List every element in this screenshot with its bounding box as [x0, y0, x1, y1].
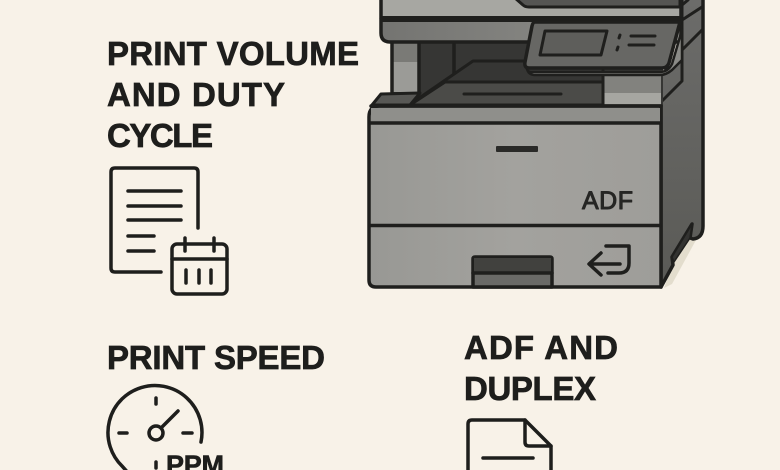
heading: print volume and duty cycle: CYCLE — [107, 117, 213, 154]
heading: print volume and duty cycle — [107, 35, 359, 154]
base left ledge — [372, 93, 420, 105]
icon: return arrow — [589, 246, 629, 275]
top strip — [371, 108, 660, 123]
heading: print speed: PRINT SPEED — [107, 339, 325, 376]
icon: document — [468, 420, 551, 470]
printer illustration — [369, 0, 703, 288]
scanner top — [381, 0, 681, 42]
control panel — [525, 22, 682, 75]
right block — [603, 74, 661, 105]
ADF label: ADF — [582, 187, 633, 215]
heading: print volume and duty cycle: AND DUTY — [107, 76, 285, 113]
heading: print volume and duty cycle: PRINT VOLUME — [107, 35, 359, 72]
icon: document with calendar — [111, 168, 227, 294]
handle — [496, 146, 538, 152]
output tray — [409, 61, 603, 105]
touchscreen — [540, 31, 607, 55]
paper drawer line — [370, 224, 660, 227]
heading: ADF and duplex: DUPLEX — [464, 370, 596, 407]
cavity — [393, 40, 663, 106]
heading: ADF and duplex — [464, 329, 618, 407]
left column — [392, 42, 454, 94]
floor shadow — [664, 238, 696, 288]
lower tray — [473, 257, 552, 287]
printer body — [369, 106, 661, 287]
printer side panel — [661, 0, 703, 287]
heading: ADF and duplex: ADF AND — [464, 329, 618, 366]
icon: speed gauge PPM — [108, 386, 224, 470]
